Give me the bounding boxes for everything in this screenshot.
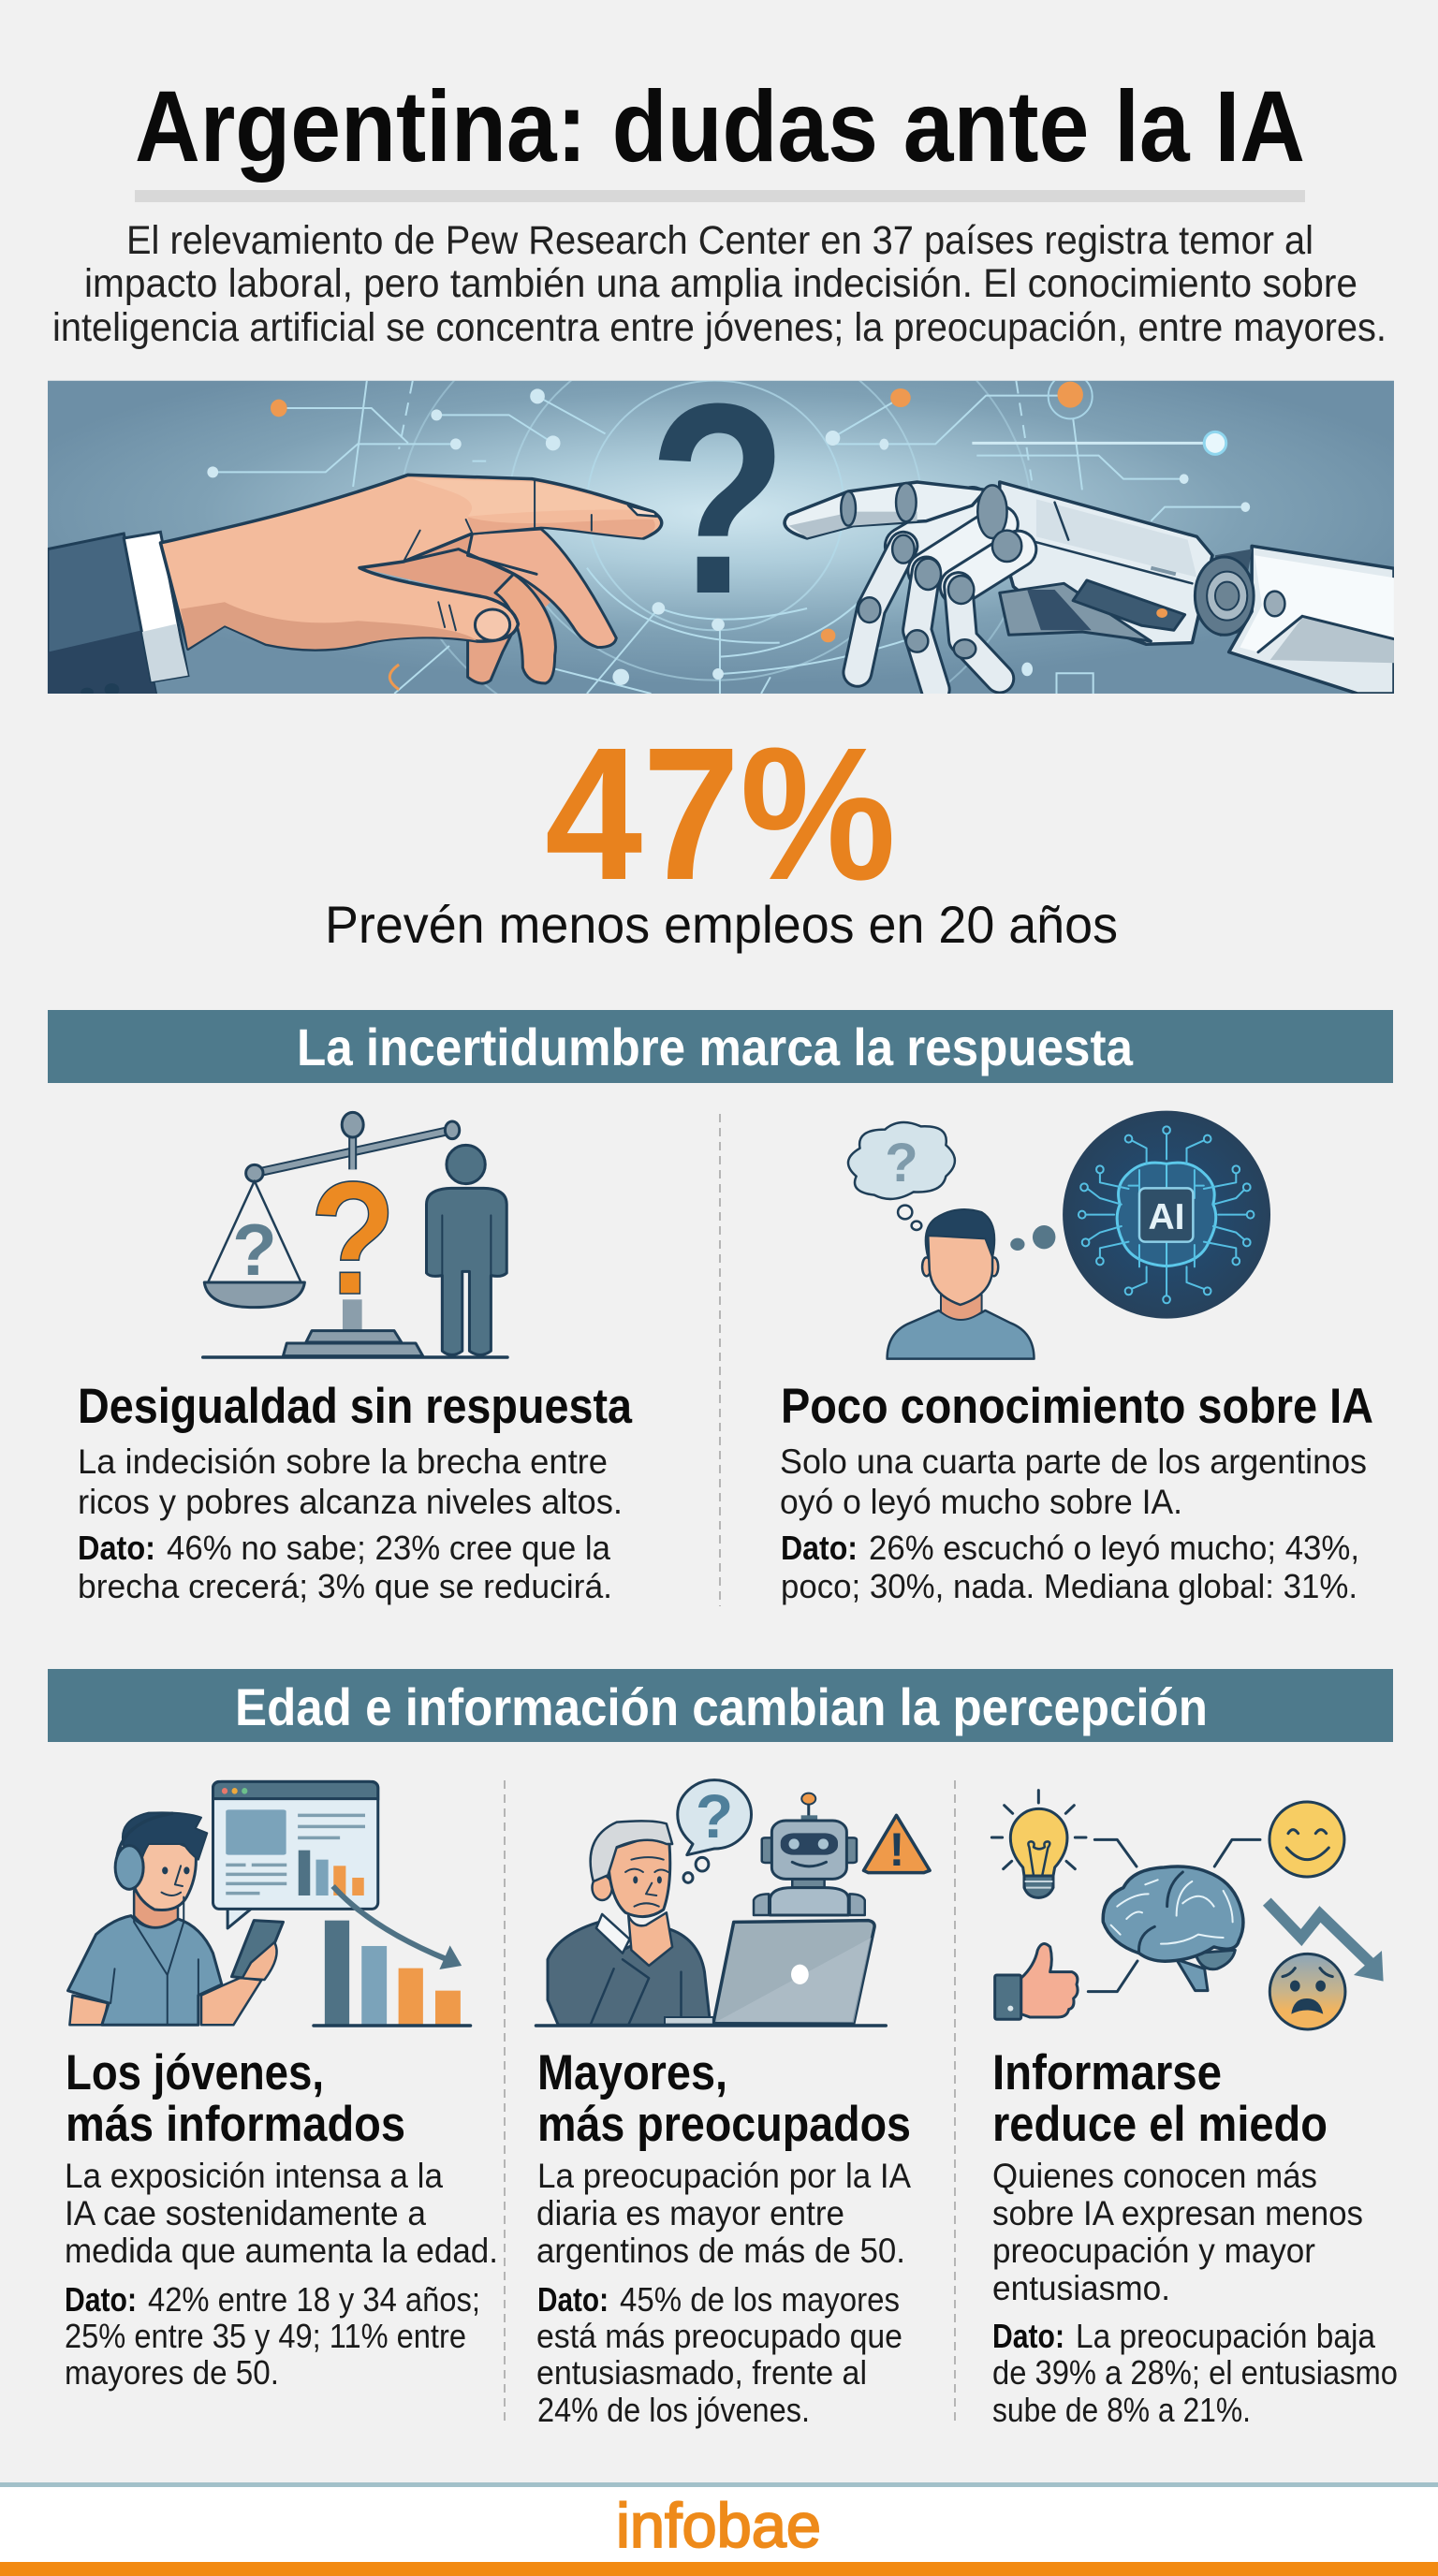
- section band 1: La incertidumbre marca la respuesta: [297, 1017, 1134, 1076]
- column: Mayores, más preocupados: 45% de los mayores: [620, 2280, 900, 2319]
- column: Los jóvenes, más informados: medida que aumenta la edad.: [65, 2232, 498, 2270]
- hero illustration: human hand and robot hand with question mark: [47, 380, 1394, 694]
- intro text: El relevamiento de Pew Research Center en 37 países registra temor al: [126, 218, 1313, 263]
- column: Mayores, más preocupados: Dato:: [537, 2280, 609, 2319]
- column: Informarse reduce el miedo: reduce el miedo: [992, 2097, 1328, 2152]
- section band 2: Edad e información cambian la percepción: [235, 1677, 1208, 1736]
- column: Mayores, más preocupados: diaria es mayor entre: [536, 2194, 844, 2232]
- section band 2: [48, 1669, 1393, 1742]
- icon: scale with question mark and person: [203, 1112, 507, 1357]
- title: Argentina: dudas ante la IA: [135, 69, 1305, 183]
- icon: person thinking about AI: [848, 1111, 1270, 1359]
- icon: person thinking about AI: AI: [1148, 1197, 1185, 1237]
- footer with infobae logo: [0, 2482, 1438, 2576]
- column: Poco conocimiento sobre IA: poco; 30%, nada. Mediana global: 31%.: [781, 1567, 1357, 1605]
- column: Poco conocimiento sobre IA: Poco conocimiento sobre IA: [781, 1379, 1373, 1434]
- intro text: [52, 218, 1387, 350]
- column: Mayores, más preocupados: [536, 2045, 911, 2429]
- fingers: [365, 535, 550, 607]
- column: Informarse reduce el miedo: preocupación y mayor: [992, 2232, 1315, 2270]
- robot index finger: [785, 482, 986, 538]
- column: Los jóvenes, más informados: 42% entre 18 y 34 años;: [148, 2280, 480, 2319]
- column: Poco conocimiento sobre IA: Solo una cuarta parte de los argentinos: [780, 1442, 1367, 1481]
- column: Desigualdad sin respuesta: Dato:: [78, 1529, 155, 1567]
- column: Poco conocimiento sobre IA: oyó o leyó mucho sobre IA.: [780, 1483, 1182, 1521]
- column: Poco conocimiento sobre IA: [780, 1379, 1373, 1605]
- icon: scale with question mark and person: ?: [232, 1208, 277, 1291]
- question mark: ?: [649, 347, 787, 651]
- stat caption: Prevén menos empleos en 20 años: [325, 895, 1118, 954]
- icon: worried older man, robot and laptop: ?: [696, 1781, 733, 1851]
- column: Desigualdad sin respuesta: Desigualdad sin respuesta: [78, 1379, 632, 1434]
- icon: scale with question mark and person: ?: [310, 1149, 396, 1328]
- column: Desigualdad sin respuesta: ricos y pobres alcanza niveles altos.: [78, 1483, 623, 1521]
- column: Mayores, más preocupados: más preocupados: [537, 2097, 911, 2152]
- column: Los jóvenes, más informados: mayores de 50.: [65, 2353, 279, 2392]
- column: Informarse reduce el miedo: entusiasmo.: [992, 2269, 1170, 2307]
- column: Los jóvenes, más informados: más informados: [66, 2097, 405, 2152]
- footer with infobae logo: infobae: [616, 2491, 821, 2561]
- palm: [160, 475, 662, 650]
- column: Informarse reduce el miedo: Quienes conocen más: [992, 2157, 1317, 2195]
- section band 1: [48, 1010, 1393, 1083]
- column: Informarse reduce el miedo: [992, 2045, 1398, 2429]
- column: Informarse reduce el miedo: de 39% a 28%; el entusiasmo: [992, 2353, 1398, 2392]
- robot hand back: [1000, 482, 1212, 644]
- column: Los jóvenes, más informados: 25% entre 35 y 49; 11% entre: [65, 2317, 466, 2355]
- intro text: impacto laboral, pero también una amplia indecisión. El conocimiento sobre: [84, 261, 1357, 306]
- column: Informarse reduce el miedo: sube de 8% a 21%.: [992, 2391, 1251, 2429]
- icon: worried older man, robot and laptop: [536, 1780, 930, 2026]
- column: Desigualdad sin respuesta: La indecisión sobre la brecha entre: [78, 1442, 608, 1481]
- column: Los jóvenes, más informados: Los jóvenes,: [66, 2045, 324, 2100]
- icon: young man with phone and falling bar chart: [67, 1781, 470, 2026]
- column: Mayores, más preocupados: 24% de los jóvenes.: [537, 2391, 810, 2429]
- column: Los jóvenes, más informados: La exposición intensa a la: [65, 2157, 443, 2195]
- column: Poco conocimiento sobre IA: 26% escuchó o leyó mucho; 43%,: [869, 1529, 1359, 1567]
- column: Desigualdad sin respuesta: brecha crecerá; 3% que se reducirá.: [78, 1567, 612, 1605]
- robot forearm: [1229, 546, 1394, 694]
- column: Informarse reduce el miedo: La preocupación baja: [1076, 2317, 1376, 2355]
- suit sleeve: [48, 534, 156, 694]
- column: Informarse reduce el miedo: Informarse: [992, 2045, 1222, 2100]
- column: Los jóvenes, más informados: Dato:: [65, 2280, 137, 2319]
- robot fingers: [903, 505, 972, 546]
- big stat 47%: 47%: [545, 708, 896, 919]
- column: Poco conocimiento sobre IA: Dato:: [781, 1529, 858, 1567]
- column: Informarse reduce el miedo: sobre IA expresan menos: [992, 2194, 1363, 2232]
- column: Mayores, más preocupados: está más preocupado que: [536, 2317, 902, 2355]
- icon: brain with bulb, thumb, faces and falling arrow: [991, 1791, 1384, 2029]
- column: Mayores, más preocupados: Mayores,: [537, 2045, 727, 2100]
- column: Mayores, más preocupados: entusiasmado, frente al: [536, 2353, 867, 2392]
- column: Desigualdad sin respuesta: [78, 1379, 632, 1605]
- icon: worried older man, robot and laptop: !: [889, 1823, 904, 1876]
- column: Los jóvenes, más informados: [65, 2045, 498, 2392]
- column: Desigualdad sin respuesta: 46% no sabe; 23% cree que la: [167, 1529, 611, 1567]
- column: Informarse reduce el miedo: Dato:: [992, 2317, 1064, 2355]
- column: Los jóvenes, más informados: IA cae sostenidamente a: [65, 2194, 426, 2232]
- column: Mayores, más preocupados: La preocupación por la IA: [537, 2157, 911, 2195]
- column: Mayores, más preocupados: argentinos de más de 50.: [536, 2232, 905, 2270]
- icon: person thinking about AI: ?: [885, 1133, 918, 1193]
